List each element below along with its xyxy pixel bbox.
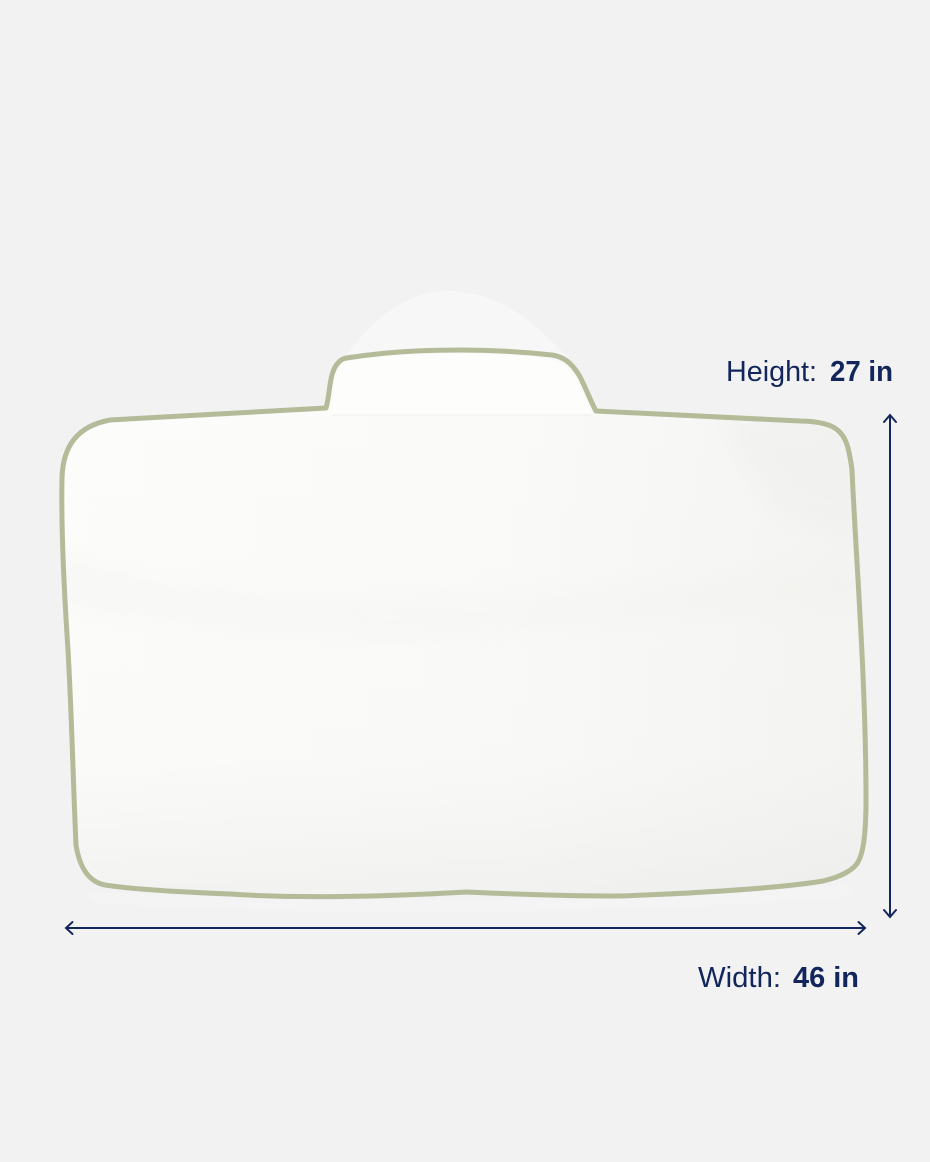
width label	[698, 962, 859, 994]
towel illustration	[59, 348, 868, 900]
hood seam	[332, 414, 592, 417]
towel shading	[88, 870, 620, 894]
hood inner panel	[331, 354, 592, 414]
width label: 46 in	[793, 962, 859, 994]
hood back	[345, 291, 570, 360]
height label: 27 in	[830, 356, 893, 388]
towel green trim	[62, 350, 866, 897]
soft glow under towel	[90, 885, 850, 912]
width arrow	[66, 922, 865, 934]
towel body	[62, 350, 866, 897]
height label	[726, 356, 893, 388]
width label: Width:	[698, 962, 781, 994]
height label: Height:	[726, 356, 817, 388]
height arrow	[884, 415, 896, 917]
